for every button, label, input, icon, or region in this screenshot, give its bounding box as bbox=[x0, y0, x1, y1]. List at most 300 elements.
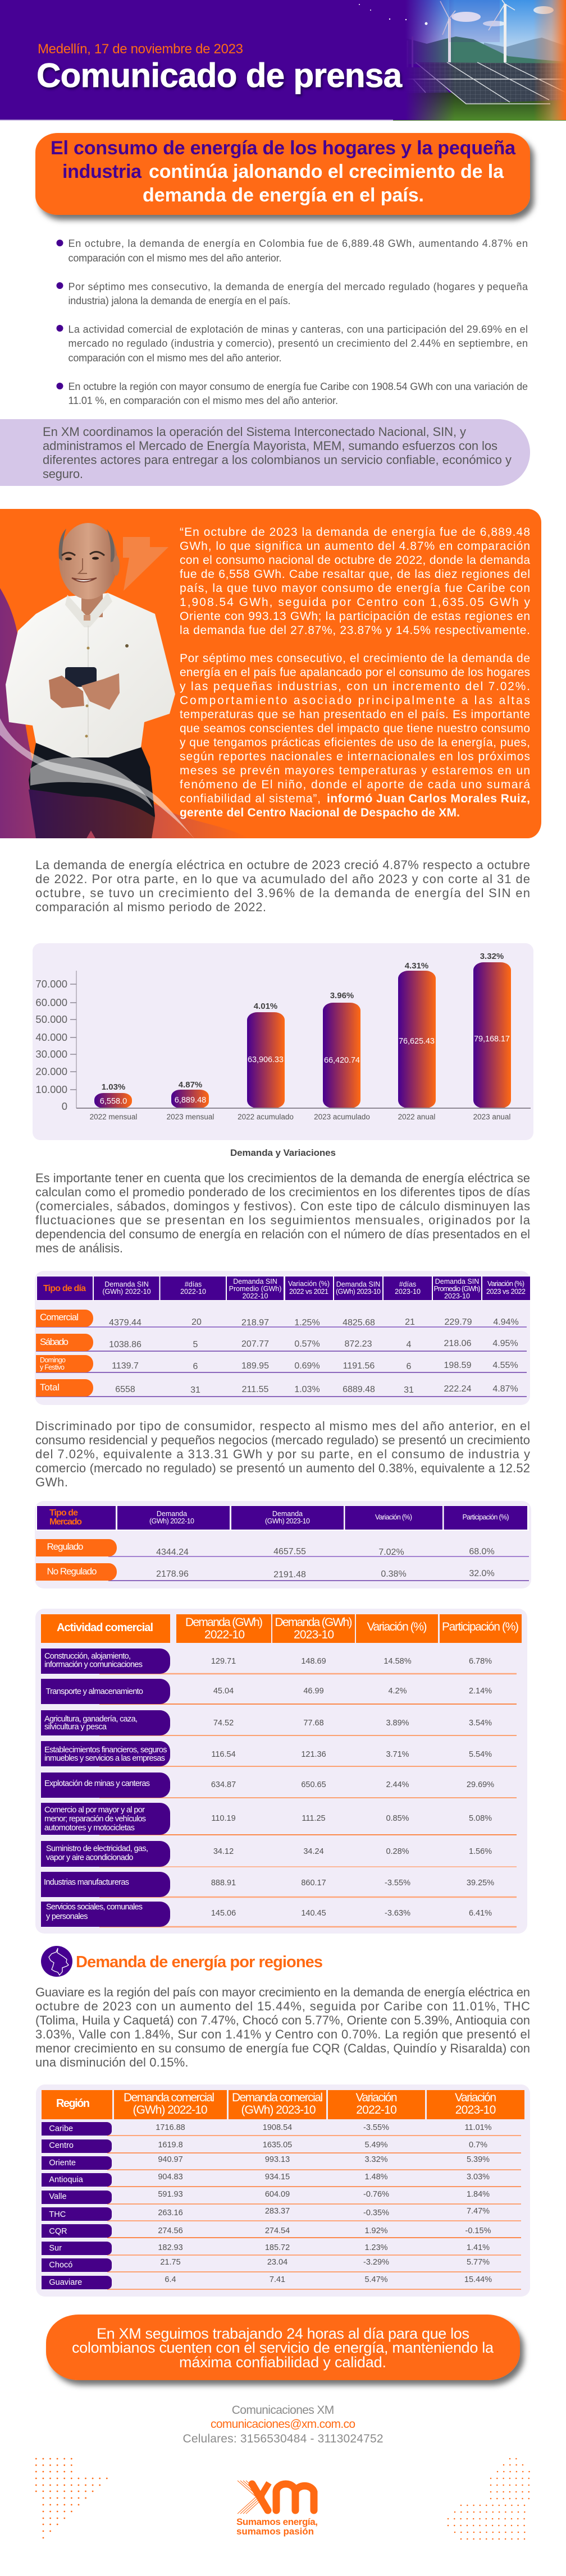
row: sabado: 872.23 bbox=[345, 1339, 372, 1349]
table header: Demanda (GWh) bbox=[185, 1616, 263, 1629]
paragraph: regiones: octubre de 2023 con un aumento del 15.44%, seguida por Caribe con 11.01%, THC bbox=[35, 1999, 530, 2013]
row: Guaviare: Guaviare bbox=[49, 2278, 82, 2287]
row: comercial: 4.94% bbox=[493, 1317, 519, 1327]
row: industrias: 888.91 bbox=[211, 1879, 236, 1888]
row: comercio: Comercio al por mayor y al por bbox=[44, 1806, 145, 1815]
row: comercio: 110.19 bbox=[211, 1814, 236, 1823]
row: domingo y festivo bbox=[36, 1355, 527, 1372]
row: construccion: 129.71 bbox=[211, 1657, 236, 1666]
row: Oriente: Oriente bbox=[49, 2159, 76, 2168]
bullet 2: industria) jalona la demanda de energía en el país. bbox=[69, 295, 291, 306]
paragraph: calculo de crecimientos bbox=[35, 1171, 531, 1255]
bar: 2023 acumulado: 2023 acumulado bbox=[314, 1113, 370, 1121]
table: tipo de mercado bbox=[35, 1501, 531, 1588]
row: Centro: 1619.8 bbox=[158, 2141, 183, 2150]
quote text: país, la que tuvo mayor consumo de energía fue Caribe con bbox=[180, 582, 530, 595]
date: Medellín, 17 de noviembre de 2023 bbox=[38, 42, 243, 57]
table header: Mercado bbox=[49, 1517, 82, 1527]
row: Centro: Centro bbox=[49, 2141, 74, 2150]
row: Oriente: 5.39% bbox=[467, 2155, 490, 2164]
intro paragraph: octubre, se tuvo un crecimiento del 3.96% de la demanda de energía del SIN en bbox=[35, 886, 530, 900]
bar: 2022 anual: 2022 anual bbox=[398, 1113, 435, 1121]
quote text: y las pequeñas industrias, con un incremento del 7.02%. bbox=[180, 680, 530, 693]
row: sabado bbox=[36, 1334, 527, 1351]
row: regulado bbox=[36, 1539, 529, 1557]
row: domingo y festivo: Domingo bbox=[40, 1356, 66, 1364]
row: explotacion de minas: 650.65 bbox=[301, 1780, 326, 1789]
paragraph: calculo de crecimientos: mes de análisis. bbox=[35, 1241, 123, 1255]
row: servicios bbox=[41, 1902, 517, 1927]
row: THC bbox=[42, 2207, 521, 2221]
table header bbox=[42, 2090, 524, 2119]
paragraph: calculo de crecimientos: (comerciales, sábados, domingos y festivos). Con este tipo de cálculo disminuyen las bbox=[35, 1199, 530, 1213]
row: comercio: automotores y motocicletas bbox=[44, 1824, 135, 1833]
y axis: 10.000 bbox=[35, 1083, 67, 1095]
row: explotacion de minas: Explotación de minas y canteras bbox=[44, 1779, 150, 1788]
quote text: con el consumo nacional de octubre de 2022, donde la demanda bbox=[180, 554, 530, 567]
paragraph: tipo de consumidor: consumo residencial y pequeños negocios (mercado regulado) se presentó un crecimiento bbox=[35, 1433, 530, 1447]
row: servicios: 145.06 bbox=[211, 1909, 236, 1918]
row: explotacion de minas: 634.87 bbox=[211, 1780, 236, 1789]
row: explotacion de minas: 2.44% bbox=[386, 1780, 409, 1789]
bar: 2023 mensual: 6,889.48 bbox=[175, 1096, 206, 1105]
paragraph: regiones: menor crecimiento en su consumo de energía fue CQR (Caldas, Quindío y Risaralda) con bbox=[35, 2041, 530, 2055]
paragraph: regiones: (Tolima, Huila y Caquetá) con 7.47%, Chocó con 5.77%, Oriente con 5.39%, Antioquia con bbox=[35, 2013, 530, 2027]
row: Caribe: Caribe bbox=[49, 2124, 73, 2133]
image: wind turbines and solar panels bbox=[359, 0, 566, 121]
row: sabado: 4 bbox=[407, 1340, 412, 1349]
row: agricultura: 74.52 bbox=[213, 1719, 234, 1728]
row: Caribe: -3.55% bbox=[363, 2123, 389, 2132]
bullet 2 bbox=[56, 281, 528, 306]
row: transporte: 2.14% bbox=[469, 1687, 492, 1696]
row: THC: THC bbox=[49, 2210, 66, 2219]
about XM band: administramos el Mercado de Energía Mayorista, MEM, sumando esfuerzos con los bbox=[43, 439, 497, 453]
XM logo: sumamos pasión bbox=[236, 2526, 314, 2537]
row: domingo y festivo: y Festivo bbox=[40, 1363, 65, 1371]
row: Oriente bbox=[42, 2155, 521, 2170]
row: CQR bbox=[42, 2224, 521, 2238]
row: suministro: 0.28% bbox=[386, 1847, 409, 1856]
paragraph: tipo de consumidor: comercio (mercado no regulado) se presentó un aumento del 0.38%, equivalente a 12.52 bbox=[35, 1461, 530, 1475]
quote text: según reportes nacionales e internacionales en los próximos bbox=[180, 750, 530, 763]
row: explotacion de minas: 29.69% bbox=[467, 1780, 494, 1789]
row: construccion: 6.78% bbox=[469, 1657, 492, 1666]
row: Caribe: 1716.88 bbox=[156, 2123, 185, 2132]
XM logo bbox=[236, 2481, 318, 2537]
row: Choco: 21.75 bbox=[160, 2258, 181, 2267]
row: Choco: 5.77% bbox=[467, 2258, 490, 2267]
row: comercio: 111.25 bbox=[302, 1814, 326, 1823]
row: Antioquia: 934.15 bbox=[265, 2173, 290, 2182]
row: Sur: 1.23% bbox=[364, 2243, 388, 2252]
row: domingo y festivo: 1139.7 bbox=[112, 1361, 139, 1371]
contact block: Celulares: 3156530484 - 3113024752 bbox=[183, 2432, 383, 2445]
bar: 2022 acumulado: 63,906.33 bbox=[248, 1055, 284, 1064]
quote text: “En octubre de 2023 la demanda de energía fue de 6,889.48 bbox=[180, 526, 530, 539]
row: transporte: 46.99 bbox=[303, 1687, 324, 1696]
y axis: 0 bbox=[62, 1100, 67, 1112]
headline callout: El consumo de energía de los hogares y la pequeña bbox=[51, 137, 516, 159]
row: Caribe: 1908.54 bbox=[263, 2123, 292, 2132]
bullet 3 bbox=[56, 324, 528, 364]
row: suministro: Suministro de electricidad, gas, bbox=[46, 1844, 148, 1853]
table header: Variación bbox=[455, 2091, 496, 2104]
bullet 4: 11.01 %, en comparación con el mismo mes del año anterior. bbox=[69, 395, 338, 406]
quote text: fenómeno de El niño, donde el aporte de cada uno sumará bbox=[180, 778, 530, 791]
row: suministro: 34.24 bbox=[303, 1847, 324, 1856]
bar: 2022 mensual: 2022 mensual bbox=[90, 1113, 137, 1121]
table header: 2023 vs 2022 bbox=[486, 1288, 526, 1296]
header banner bbox=[0, 0, 566, 121]
row: agricultura: 3.89% bbox=[386, 1719, 409, 1728]
table header: #días bbox=[185, 1280, 202, 1288]
table header: (GWh) 2023-10 bbox=[265, 1517, 310, 1525]
quote text: temperaturas que se han presentado en el país. Es importante bbox=[180, 708, 530, 721]
row: THC: 7.47% bbox=[467, 2207, 490, 2216]
closing callout: En XM seguimos trabajando 24 horas al día para que los bbox=[97, 2325, 469, 2342]
row: domingo y festivo: 0.69% bbox=[294, 1361, 320, 1371]
row: construccion: Construcción, alojamiento, bbox=[44, 1652, 131, 1661]
quote text: informó Juan Carlos Morales Ruiz, bbox=[327, 792, 530, 805]
row: suministro: vapor y aire acondicionado bbox=[46, 1853, 134, 1862]
table header: Promedio (GWh) bbox=[229, 1285, 281, 1293]
dotted pattern left bbox=[36, 2459, 108, 2538]
row: Valle: Valle bbox=[49, 2192, 67, 2201]
row: transporte: 45.04 bbox=[213, 1687, 234, 1696]
row: comercio: menor; reparación de vehículos bbox=[44, 1815, 146, 1824]
row: domingo y festivo: 198.59 bbox=[444, 1361, 472, 1370]
row: servicios: y personales bbox=[46, 1912, 88, 1921]
row: industrias: -3.55% bbox=[385, 1879, 410, 1888]
row: CQR: 1.92% bbox=[364, 2226, 388, 2235]
row: construccion: 14.58% bbox=[384, 1657, 412, 1666]
bullet 2: Por séptimo mes consecutivo, la demanda de energía del mercado regulado (hogares y pequeña bbox=[69, 281, 528, 292]
quote text: la demanda fue del 27.87%, 23.87% y 14.5% respectivamente. bbox=[180, 624, 530, 637]
row: agricultura: 3.54% bbox=[469, 1719, 492, 1728]
row: total: 31 bbox=[190, 1385, 200, 1395]
row: Sur: Sur bbox=[49, 2244, 62, 2253]
quote text: meses se prevén mayores temperaturas y estaremos en un bbox=[180, 764, 530, 777]
bar: 2023 acumulado: 66,420.74 bbox=[324, 1056, 360, 1065]
bullet 3: comparación con el mismo mes del año anterior. bbox=[69, 352, 282, 364]
quote text: que seamos conscientes del impacto que tiene nuestro consumo bbox=[180, 722, 530, 735]
intro paragraph: de 2022. Por otra parte, en lo que va acumulado del año 2023 y con corte al 31 de bbox=[35, 872, 530, 886]
table header bbox=[36, 1276, 531, 1301]
row: transporte: 4.2% bbox=[388, 1687, 407, 1696]
row: comercial: 4379.44 bbox=[109, 1318, 142, 1328]
bar: 2023 anual: 79,168.17 bbox=[474, 1035, 510, 1044]
bar: 2022 acumulado: 2022 acumulado bbox=[238, 1113, 294, 1121]
row: total: 1.03% bbox=[294, 1385, 320, 1394]
row: regulado: Regulado bbox=[47, 1541, 83, 1552]
row: construccion bbox=[41, 1649, 517, 1674]
row: Caribe bbox=[42, 2122, 521, 2136]
row: Antioquia: 904.83 bbox=[158, 2173, 183, 2182]
row: THC: 283.37 bbox=[265, 2207, 290, 2216]
paragraph: regiones: 3.03%, Valle con 1.84%, Sur con 1.41% y Centro con 0.70%. La región que presentó el bbox=[35, 2027, 530, 2041]
row: CQR: 274.54 bbox=[265, 2226, 290, 2235]
row: domingo y festivo: 1191.56 bbox=[343, 1361, 375, 1371]
row: THC: 263.16 bbox=[158, 2208, 183, 2217]
y axis: 40.000 bbox=[35, 1031, 67, 1043]
row: Valle bbox=[42, 2190, 521, 2204]
table header: Demanda comercial bbox=[124, 2091, 214, 2104]
row: agricultura: Agricultura, ganadería, caza, bbox=[44, 1715, 138, 1724]
row: establecimientos financieros: Establecimientos financieros, seguros bbox=[44, 1746, 167, 1755]
row: Choco: Chocó bbox=[49, 2261, 72, 2270]
table header: #días bbox=[399, 1280, 416, 1288]
table header: Demanda bbox=[157, 1510, 187, 1518]
row: regulado: 7.02% bbox=[378, 1548, 404, 1557]
row: Valle: 604.09 bbox=[265, 2190, 290, 2199]
headline callout: demanda de energía en el país. bbox=[143, 185, 424, 206]
table header: Variación bbox=[356, 2091, 398, 2104]
table header: 2022-10 bbox=[356, 2104, 397, 2116]
row: comercial: 21 bbox=[405, 1317, 415, 1327]
contact block: Comunicaciones XM bbox=[232, 2404, 334, 2417]
about XM band: diferentes actores para entregar a los colombianos un servicio confiable, económico y bbox=[43, 453, 512, 467]
row: no regulado: 32.0% bbox=[469, 1569, 495, 1578]
row: comercio bbox=[41, 1803, 517, 1835]
table: regiones bbox=[36, 2084, 530, 2297]
table header bbox=[41, 1614, 522, 1643]
row: Centro: 5.49% bbox=[364, 2141, 388, 2150]
bar: 2023 anual: 2023 anual bbox=[473, 1113, 510, 1121]
row: Valle: 591.93 bbox=[158, 2190, 183, 2199]
row: sabado: 207.77 bbox=[241, 1339, 269, 1349]
table header: (GWh) 2022-10 bbox=[149, 1517, 194, 1525]
bar: 2022 mensual: 6,558.0 bbox=[100, 1097, 127, 1106]
row: Guaviare: 6.4 bbox=[165, 2275, 176, 2284]
quote text: Comportamiento asociado principalmente a las altas bbox=[180, 694, 530, 707]
row: domingo y festivo: 6 bbox=[193, 1362, 198, 1371]
row: Oriente: 940.97 bbox=[158, 2155, 183, 2164]
row: servicios: Servicios sociales, comunales bbox=[46, 1903, 143, 1912]
quote text: Oriente con 993.13 GWh; la participación de estas regiones en bbox=[180, 610, 530, 623]
bar: 2022 mensual bbox=[90, 1082, 137, 1121]
paragraph: regiones bbox=[35, 1985, 530, 2069]
table header: Variación (%) bbox=[375, 1513, 412, 1521]
table header: Tipo de bbox=[49, 1508, 78, 1518]
row: Sur: 1.41% bbox=[467, 2243, 490, 2252]
table header: Variación (%) bbox=[367, 1620, 427, 1633]
closing callout bbox=[46, 2315, 520, 2380]
row: industrias: 860.17 bbox=[301, 1879, 326, 1888]
row: Centro: 0.7% bbox=[469, 2141, 487, 2150]
quote text: y que tengamos prácticas eficientes de uso de la energía, pues, bbox=[180, 736, 530, 749]
row: transporte bbox=[41, 1679, 517, 1704]
row: Guaviare bbox=[42, 2275, 521, 2289]
contact block bbox=[183, 2404, 383, 2445]
paragraph: regiones: Guaviare es la región del país con mayor crecimiento en la demanda de energía eléctrica en bbox=[35, 1985, 530, 1999]
table header: Tipo de día bbox=[43, 1284, 86, 1293]
table header: Participación (%) bbox=[442, 1620, 519, 1633]
bullet 1: comparación con el mismo mes del año anterior. bbox=[69, 252, 282, 264]
row: sabado: 0.57% bbox=[294, 1339, 320, 1349]
row: CQR: 274.56 bbox=[158, 2226, 183, 2235]
y axis: 60.000 bbox=[35, 997, 67, 1008]
contact block: comunicaciones@xm.com.co bbox=[211, 2418, 355, 2431]
quote text: confiabilidad al sistema”, bbox=[180, 792, 321, 805]
table header: Variación (%) bbox=[288, 1280, 330, 1288]
closing callout: colombianos cuenten con el servicio de energía, manteniendo la bbox=[72, 2339, 494, 2356]
paragraph: regiones: una disminución del 0.15%. bbox=[35, 2055, 189, 2069]
row: sabado: 218.06 bbox=[444, 1339, 472, 1348]
table header: (GWh) 2022-10 bbox=[133, 2104, 208, 2116]
decorative light streak bbox=[0, 718, 195, 840]
quote text bbox=[180, 526, 530, 819]
row: sabado: 1038.86 bbox=[109, 1340, 142, 1349]
bullet 3: mercado no regulado (industria y comercio), presentó un crecimiento del 2.44% en septiembre, en bbox=[69, 338, 528, 349]
row: comercial: Comercial bbox=[40, 1312, 79, 1323]
bar: 2022 acumulado bbox=[238, 1002, 294, 1121]
intro paragraph: comparación al mismo periodo de 2022. bbox=[35, 900, 266, 914]
row: Antioquia: Antioquia bbox=[49, 2175, 84, 2184]
bar: 2023 acumulado: 3.96% bbox=[330, 991, 354, 1000]
closing callout: máxima confiabilidad y calidad. bbox=[179, 2354, 386, 2371]
row: domingo y festivo: 4.55% bbox=[492, 1361, 518, 1370]
row: regulado: 68.0% bbox=[469, 1547, 495, 1556]
portrait: spokesperson bbox=[6, 523, 175, 838]
row: Valle: -0.76% bbox=[363, 2190, 389, 2199]
table header: 2022 vs 2021 bbox=[289, 1288, 328, 1296]
bar: 2022 anual bbox=[398, 961, 436, 1121]
title: Comunicado de prensa bbox=[36, 57, 403, 94]
quote panel bbox=[0, 509, 541, 840]
bar: 2022 anual: 4.31% bbox=[405, 961, 428, 971]
paragraph: tipo de consumidor: GWh. bbox=[35, 1475, 68, 1489]
chart caption: Demanda y Variaciones bbox=[230, 1147, 336, 1158]
row: Centro: 1635.05 bbox=[263, 2141, 292, 2150]
dotted pattern right bbox=[448, 2459, 530, 2539]
row: domingo y festivo: 6 bbox=[407, 1362, 412, 1371]
row: Guaviare: 15.44% bbox=[464, 2275, 492, 2284]
intro paragraph: La demanda de energía eléctrica en octubre de 2023 creció 4.87% respecto a octubre bbox=[35, 858, 530, 872]
row: agricultura bbox=[41, 1710, 517, 1735]
row: sabado: 5 bbox=[193, 1340, 198, 1349]
row: establecimientos financieros: inmuebles y servicios a las empresas bbox=[44, 1754, 165, 1763]
quote text: GWh, lo que significa un aumento del 4.87% en comparación bbox=[180, 540, 530, 553]
bar: 2023 mensual bbox=[167, 1080, 214, 1121]
paragraph: tipo de consumidor: del 7.02%, equivalente a 313.31 GWh y por su parte, en el consumo de industria y bbox=[35, 1447, 530, 1461]
table header: 2023-10 bbox=[294, 1628, 334, 1641]
row: Choco bbox=[42, 2258, 521, 2272]
row: transporte: Transporte y almacenamiento bbox=[46, 1687, 143, 1696]
table header: Región bbox=[56, 2097, 90, 2110]
row: suministro: 1.56% bbox=[469, 1847, 492, 1856]
logo tagline: Sumamos energía, bbox=[236, 2517, 318, 2527]
y axis: 70.000 bbox=[35, 978, 67, 990]
table header: Demanda SIN bbox=[435, 1278, 479, 1285]
row: total: 222.24 bbox=[444, 1384, 472, 1394]
paragraph: tipo de consumidor bbox=[35, 1419, 530, 1489]
bar: 2023 anual bbox=[473, 952, 511, 1121]
row: suministro bbox=[41, 1841, 517, 1867]
row: establecimientos financieros: 3.71% bbox=[386, 1750, 409, 1759]
row: comercial: 4825.68 bbox=[343, 1318, 375, 1328]
row: no regulado: 0.38% bbox=[381, 1569, 407, 1579]
bar chart: demanda y variaciones bbox=[33, 943, 533, 1140]
table header: Demanda bbox=[272, 1510, 303, 1518]
paragraph: tipo de consumidor: Discriminado por tipo de consumidor, respecto al mismo mes del año anterior, en el bbox=[35, 1419, 530, 1433]
row: agricultura: 77.68 bbox=[303, 1719, 324, 1728]
table header: Participación (%) bbox=[463, 1513, 509, 1521]
row: Oriente: 993.13 bbox=[265, 2155, 290, 2164]
headline callout: continúa jalonando el crecimiento de la bbox=[149, 161, 504, 182]
row: comercio: 0.85% bbox=[386, 1814, 409, 1823]
row: servicios: 140.45 bbox=[301, 1909, 326, 1918]
table header: 2022-10 bbox=[180, 1288, 206, 1296]
row: Sur: 182.93 bbox=[158, 2243, 183, 2252]
table header bbox=[36, 1505, 529, 1531]
row: sabado: Sábado bbox=[40, 1337, 69, 1347]
y axis: 30.000 bbox=[35, 1048, 67, 1060]
bullet 4: En octubre la región con mayor consumo de energía fue Caribe con 1908.54 GWh con una variación de bbox=[69, 381, 528, 392]
row: Antioquia: 1.48% bbox=[364, 2173, 388, 2182]
row: no regulado: 2178.96 bbox=[156, 1569, 189, 1579]
row: Choco: -3.29% bbox=[363, 2258, 389, 2267]
row: suministro: 34.12 bbox=[213, 1847, 234, 1856]
row: establecimientos financieros: 121.36 bbox=[301, 1750, 326, 1759]
table header: Demanda SIN bbox=[336, 1280, 380, 1288]
table header: 2023-10 bbox=[444, 1292, 470, 1300]
y axis: 50.000 bbox=[35, 1013, 67, 1025]
intro paragraph bbox=[35, 858, 530, 914]
row: total: Total bbox=[40, 1382, 60, 1393]
paragraph: calculo de crecimientos: dependencia del consumo de energía en relación con el número de días presentados en el bbox=[35, 1227, 530, 1241]
y axis bbox=[35, 971, 76, 1112]
bar: 2023 acumulado bbox=[314, 991, 370, 1121]
bar: 2023 anual: 3.32% bbox=[480, 952, 504, 961]
table: actividad comercial bbox=[35, 1609, 527, 1934]
table header: Promedio (GWh) bbox=[433, 1285, 481, 1293]
row: industrias bbox=[41, 1872, 517, 1897]
headline callout: industria bbox=[62, 161, 142, 182]
table header: Demanda SIN bbox=[233, 1278, 277, 1285]
row: establecimientos financieros: 116.54 bbox=[211, 1750, 236, 1759]
row: no regulado: No Regulado bbox=[47, 1566, 97, 1577]
icon: Colombia map bbox=[41, 1946, 72, 1977]
row: construccion: 148.69 bbox=[301, 1657, 326, 1666]
row: comercio: 5.08% bbox=[469, 1814, 492, 1823]
bullet 3: La actividad comercial de explotación de minas y canteras, con una participación del 29.69% en el bbox=[69, 324, 528, 335]
table header: Variación (%) bbox=[487, 1280, 524, 1288]
row: Centro bbox=[42, 2139, 521, 2153]
heading: demanda por regiones: Demanda de energía por regiones bbox=[76, 1953, 323, 1971]
quote text: gerente del Centro Nacional de Despacho de XM. bbox=[180, 806, 460, 819]
paragraph: calculo de crecimientos: fluctuaciones que se presentan en los seguimientos mensuales, originados por la bbox=[35, 1213, 531, 1227]
row: comercial: 20 bbox=[191, 1317, 202, 1327]
row: Oriente: 3.32% bbox=[364, 2155, 388, 2164]
about XM band: En XM coordinamos la operación del Sistema Interconectado Nacional, SIN, y bbox=[43, 425, 466, 439]
table header: 2022-10 bbox=[204, 1628, 245, 1641]
row: no regulado bbox=[36, 1563, 529, 1581]
table header: (GWh) 2023-10 bbox=[241, 2104, 316, 2116]
paragraph: calculo de crecimientos: Es importante tener en cuenta que los crecimientos de la demanda de energía eléctrica se bbox=[35, 1171, 530, 1185]
row: domingo y festivo: 189.95 bbox=[241, 1361, 269, 1371]
bar: 2023 mensual: 4.87% bbox=[179, 1080, 202, 1090]
table header: (GWh) 2023-10 bbox=[336, 1288, 381, 1296]
table header: Demanda SIN bbox=[104, 1280, 149, 1288]
row: THC: -0.35% bbox=[363, 2208, 389, 2217]
row: sabado: 4.95% bbox=[492, 1339, 518, 1348]
bullet 1 bbox=[56, 238, 528, 264]
table header: 2023-10 bbox=[395, 1288, 421, 1296]
row: total: 31 bbox=[404, 1385, 414, 1395]
about XM band bbox=[0, 419, 530, 486]
table header: 2022-10 bbox=[243, 1292, 268, 1300]
